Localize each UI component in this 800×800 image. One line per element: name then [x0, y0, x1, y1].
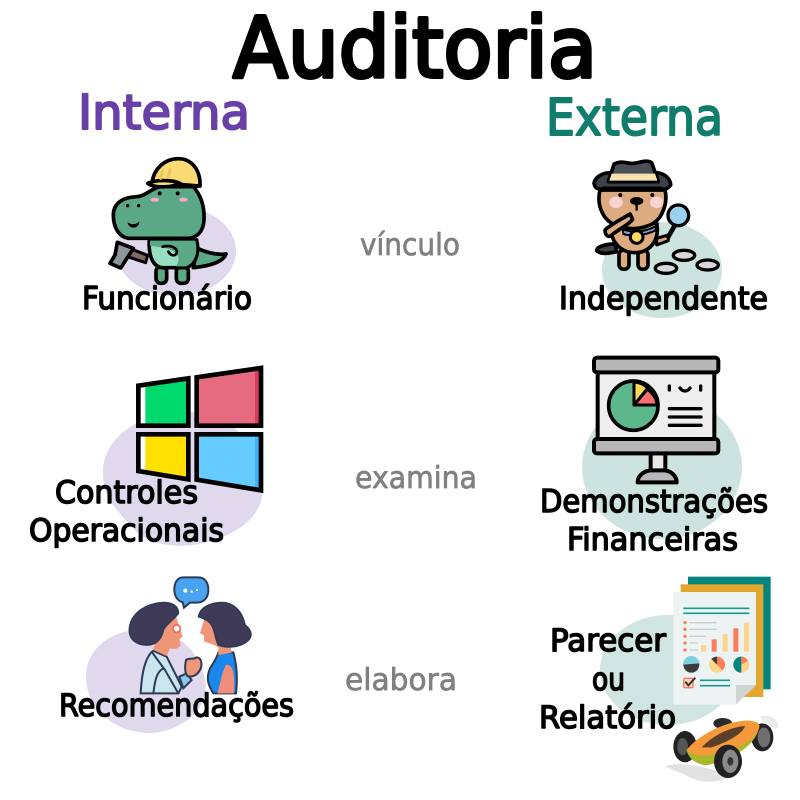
blob: purple background — [116, 206, 236, 296]
panel: funcionário — [82, 159, 252, 317]
label: Parecer ou Relatório — [539, 623, 676, 736]
label: Demonstrações Financeiras — [540, 484, 768, 558]
panel: controles operacionais — [29, 368, 263, 549]
label: Controles Operacionais — [29, 475, 224, 549]
icon: detective dog with magnifying glass — [594, 161, 718, 273]
blob: teal background — [600, 615, 736, 725]
label: Funcionário: Funcionário — [82, 281, 252, 317]
panel: independente — [559, 161, 768, 318]
blob: purple background — [103, 412, 263, 546]
blob: purple background — [86, 630, 206, 733]
heading: Externa: Externa — [546, 89, 723, 148]
title: Auditoria — [233, 0, 597, 97]
icon: dinosaur with hard hat and hammer — [110, 159, 226, 283]
icon: stacked report pages with charts — [673, 577, 771, 705]
panel: recomendações — [59, 577, 294, 733]
label: Parecer ou Relatório: Parecer — [550, 623, 666, 659]
blob: teal background — [582, 395, 742, 539]
icon: presentation board with pie chart — [594, 358, 718, 482]
label: Demonstrações Financeiras: Demonstrações — [540, 484, 768, 520]
icon: four-pane window — [138, 368, 261, 490]
icon: papaya car — [665, 716, 779, 782]
panel: parecer ou relatório — [539, 577, 779, 782]
label: Parecer ou Relatório: Relatório — [539, 700, 676, 736]
blob: teal background — [602, 222, 722, 318]
label: Controles Operacionais: Controles — [55, 475, 198, 511]
text: elabora: elabora — [345, 663, 457, 698]
label: Controles Operacionais: Operacionais — [29, 513, 224, 549]
icon: two women talking with speech bubble — [129, 577, 251, 693]
label: Recomendações: Recomendações — [59, 688, 294, 724]
panel: demonstrações financeiras — [540, 358, 768, 558]
label: Demonstrações Financeiras: Financeiras — [567, 522, 738, 558]
text: vínculo: vínculo — [360, 228, 460, 263]
label: Parecer ou Relatório: ou — [592, 662, 625, 698]
heading: Interna: Interna — [78, 85, 250, 141]
text: examina: examina — [355, 461, 477, 496]
label: Independente: Independente — [559, 281, 768, 317]
